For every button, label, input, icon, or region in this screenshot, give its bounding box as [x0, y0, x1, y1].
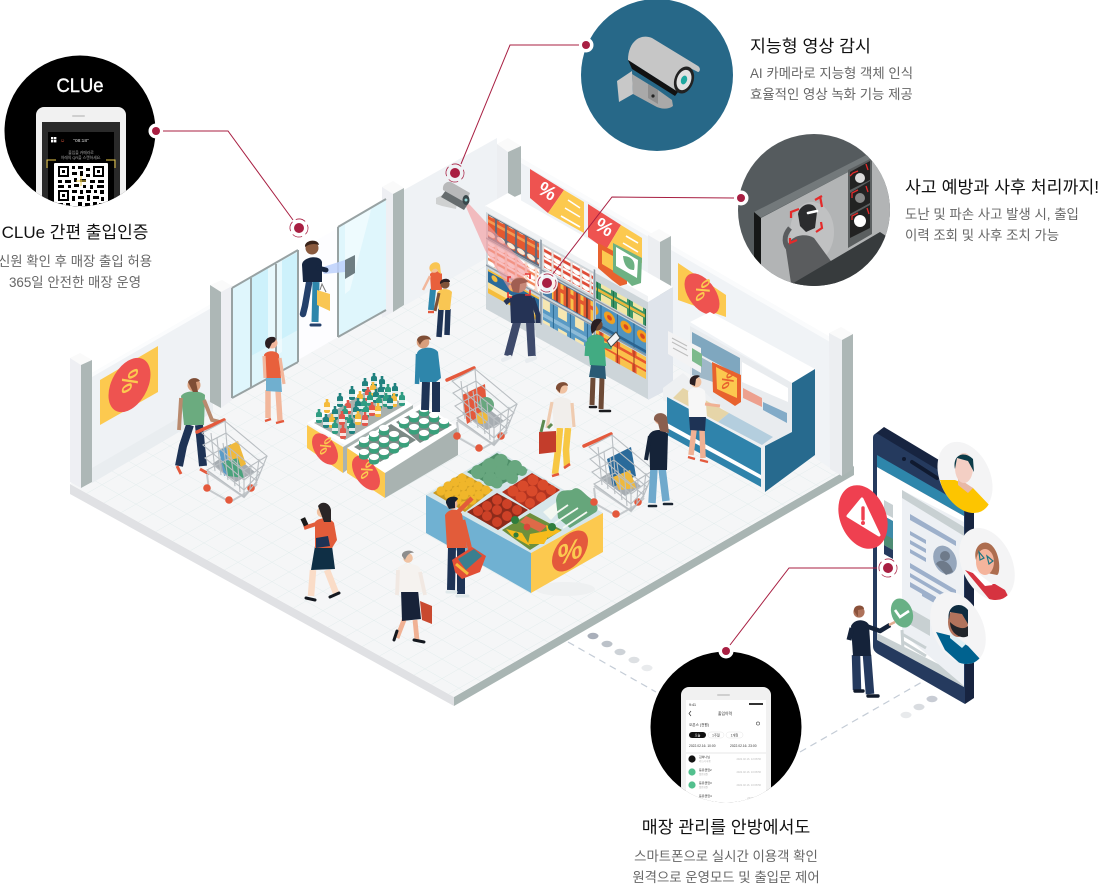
- produce stand: [426, 451, 603, 596]
- connector: theft callout to shelf: [535, 190, 748, 295]
- text: remote store management: 스마트폰으로 실시간 이용객 확인: [634, 849, 818, 864]
- produce stand: %: [558, 532, 583, 573]
- text: CLUe easy entry authentication: 365일 안전한 매장 운영: [9, 275, 141, 290]
- wall sign: left percent banner: %: [116, 365, 142, 398]
- freezer wall sign: [678, 263, 726, 322]
- avatar: man in yellow: [937, 442, 992, 513]
- text: CLUe easy entry authentication: 신원 확인 후 매장 출입 허용: [0, 254, 152, 269]
- phone with entry log app: 등유클럽2: [699, 767, 712, 772]
- callout: CLUe QR circle: CLUe: [56, 76, 104, 97]
- freezer product tag and bubble: [668, 331, 741, 406]
- shopper: woman with phone: [300, 503, 339, 600]
- sliding glass doors: [232, 199, 386, 398]
- text: intelligent video surveillance: AI 카메라로 지능형 객체 인식: [750, 66, 913, 81]
- big smartphone: [873, 427, 974, 704]
- wall posts: [70, 138, 853, 488]
- shopper: older woman with bag: [394, 551, 432, 642]
- text: prevention and follow-up: 도난 및 파손 사고 발생 시, 출입: [905, 207, 1079, 222]
- dashed connector lines and stepping dots: [568, 633, 938, 752]
- callout: theft detection circle: [736, 132, 894, 292]
- promo table: cups: %: [357, 456, 377, 483]
- phone with entry log app: 등유클럽3: [699, 780, 712, 785]
- callout: camera circle: [581, 0, 733, 151]
- phone with QR pass: ☺: [60, 138, 65, 144]
- connector: CLUe callout to door: [148, 124, 311, 240]
- text: intelligent video surveillance: [750, 36, 913, 102]
- text: remote store management: [632, 817, 820, 884]
- phone with entry log app: 2022.02.16.: [747, 796, 761, 800]
- text: intelligent video surveillance: 지능형 영상 감시: [750, 36, 871, 56]
- check bubble: [887, 595, 917, 631]
- shopping cart: right: [584, 434, 654, 518]
- phone with entry log app: 출입이력: [718, 711, 732, 716]
- text: prevention and follow-up: [905, 177, 1099, 243]
- store walls: [92, 138, 830, 483]
- text: remote store management: 매장 관리를 안방에서도: [642, 817, 810, 837]
- text: CLUe easy entry authentication: [0, 223, 152, 290]
- text: prevention and follow-up: 사고 예방과 사후 처리까지!: [905, 177, 1099, 197]
- phone with entry log app: 1개월: [731, 732, 738, 738]
- text: intelligent video surveillance: 효율적인 영상 녹화 기능 제공: [750, 87, 913, 102]
- avatar: woman with glasses: [964, 528, 1014, 600]
- phone with entry log app: 일반회원: [699, 772, 708, 776]
- icon: security camera: [617, 37, 700, 109]
- store shelf unit: [485, 193, 673, 400]
- alert bubble: [829, 478, 897, 556]
- shopper: woman at freezer: [688, 375, 720, 462]
- phone with entry log app: 9:41: [689, 703, 696, 707]
- connector: camera callout to store camera: [443, 38, 594, 185]
- phone with QR pass: "08:18": [73, 138, 89, 144]
- shopper: man in blue: [417, 336, 441, 412]
- avatar: man with beard: [933, 592, 986, 664]
- shopper: woman with yellow trousers: [539, 382, 574, 476]
- shopping cart: left: [197, 420, 267, 504]
- shopper: man in tracksuit under face recognition: [503, 274, 538, 361]
- shopper: woman in navy: [646, 413, 672, 506]
- shopper: man at door: [302, 241, 355, 325]
- phone with entry log app: 오늘: [695, 732, 700, 738]
- connector: app callout to big phone: [718, 556, 900, 658]
- text: CLUe easy entry authentication: CLUe 간편 출입인증: [2, 223, 148, 242]
- freezer wall sign: %: [691, 275, 715, 306]
- shopper: man in red sweater with basket: [445, 497, 486, 596]
- pink camera view beam: [463, 200, 530, 291]
- manager figure: [849, 605, 895, 696]
- shopper: woman in red shirt: [264, 337, 284, 423]
- freezer product tag and bubble: %: [718, 368, 737, 392]
- phone with entry log app: 일반회원: [699, 785, 708, 789]
- phone with entry log app: 오픈스 (전원): [689, 722, 709, 727]
- shopper: man in green with cart: [177, 378, 220, 474]
- phone with entry log app: 1주일: [712, 732, 720, 738]
- produce: leafy greens: [543, 488, 598, 528]
- phone with entry log app: 2022.02.16. 10:08:56: [736, 770, 762, 774]
- security camera in store: [436, 182, 470, 210]
- promo table: bottles: %: [316, 434, 335, 458]
- shelf speech bubbles: [598, 243, 642, 286]
- phone with entry log app: 카드키 사용: [699, 759, 711, 763]
- phone with QR pass: 아래의 QR을 스캔하세요.: [61, 155, 101, 160]
- promo table: cups: [347, 403, 458, 498]
- phone with entry log app: 2022.02.16. 10:08:56: [736, 783, 762, 787]
- freezer counter: [663, 312, 815, 492]
- produce: green cabbage: [467, 453, 528, 488]
- phone with entry log app: 2022.02.16. 10:00: [689, 744, 716, 748]
- store floor: [70, 246, 854, 706]
- callout: CLUe QR circle: [4, 56, 156, 206]
- phone with entry log app: 등유클럽4: [699, 793, 712, 798]
- shelf percent signs: %: [534, 178, 560, 206]
- shopping cart: centre: [447, 368, 517, 452]
- phone with entry log app: [681, 687, 771, 812]
- produce: mixed vegetables: [502, 513, 562, 550]
- text: prevention and follow-up: 이력 조회 및 사후 조치 가능: [905, 228, 1059, 243]
- shoppers: two children near entrance: [423, 262, 452, 337]
- phone with entry log app: 김하나님: [699, 754, 710, 759]
- phone with QR pass: [36, 107, 126, 206]
- shelf percent signs: %: [591, 214, 617, 242]
- shelf percent signs: [530, 169, 642, 263]
- produce: red peppers: [502, 473, 560, 510]
- promo table: bottles: [307, 373, 413, 473]
- callout: mobile app circle: [650, 652, 802, 812]
- produce: tomatoes: [467, 493, 528, 530]
- wall sign: left percent banner: [100, 346, 158, 425]
- phone with entry log app: 2022.02.16. 12:08:56: [736, 757, 762, 761]
- phone with QR pass: 출입을 카메라로: [68, 150, 94, 155]
- shopper: woman with tablet: [587, 319, 620, 411]
- phone with entry log app: 2022.02.16. 23:00: [730, 744, 757, 748]
- produce: yellow fruit: [433, 473, 493, 512]
